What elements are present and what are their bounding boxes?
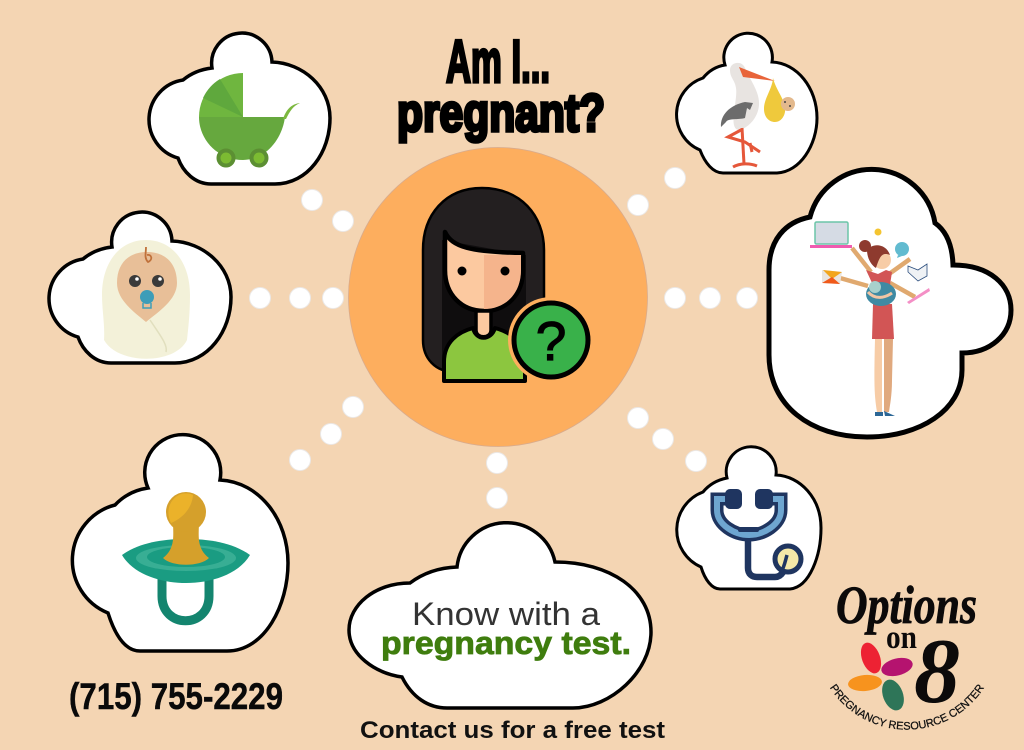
icon: stethoscope <box>717 489 801 577</box>
icon: inner hair shadow <box>442 240 526 366</box>
logo tagline: PREGNANCY RESOURCE CENTER <box>830 684 984 730</box>
logo flower <box>847 640 915 713</box>
cloud: stethoscope <box>677 447 821 589</box>
title: Am I... pregnant?: pregnant? <box>397 84 605 143</box>
icon: question badge <box>508 297 594 383</box>
logo text: 8: 8 <box>914 620 960 722</box>
cloud: busy mother <box>769 169 1011 437</box>
text: know with a: Know with a <box>412 596 600 632</box>
title: Am I... pregnant?: Am I... <box>446 28 550 95</box>
cloud: pacifier <box>72 435 288 651</box>
contact us line: Contact us for a free test <box>360 717 665 744</box>
icon: green shirt <box>444 328 525 381</box>
phone number: (715) 755-2229 <box>69 676 283 717</box>
cloud: pram <box>149 33 330 184</box>
icon: multitasking mother with baby <box>810 222 930 416</box>
icon: stork carrying baby <box>721 63 795 167</box>
icon: neck <box>476 311 491 337</box>
cloud: swaddled baby <box>49 212 231 363</box>
thought dots <box>250 168 758 508</box>
icon: face <box>445 232 523 311</box>
icon: green pram <box>199 73 300 166</box>
icon: pacifier <box>122 492 250 621</box>
logo arc path <box>830 688 984 730</box>
logo text: on: on <box>886 620 917 656</box>
text: pregnancy test: pregnancy test. <box>381 625 631 661</box>
logo: Options on 8 <box>830 575 984 730</box>
cloud: know with a pregnancy test <box>349 523 651 708</box>
icon: question badge: ? <box>536 310 566 372</box>
title: Am I... pregnant? <box>397 28 605 143</box>
icon: face shaded half <box>484 255 521 309</box>
cloud: stork <box>677 33 817 173</box>
icon: baby in blanket <box>102 240 190 359</box>
logo text: Options: Options <box>836 575 977 635</box>
central orange circle with woman icon <box>348 148 648 446</box>
icon: eyes <box>458 266 510 276</box>
icon: hair <box>423 188 544 372</box>
